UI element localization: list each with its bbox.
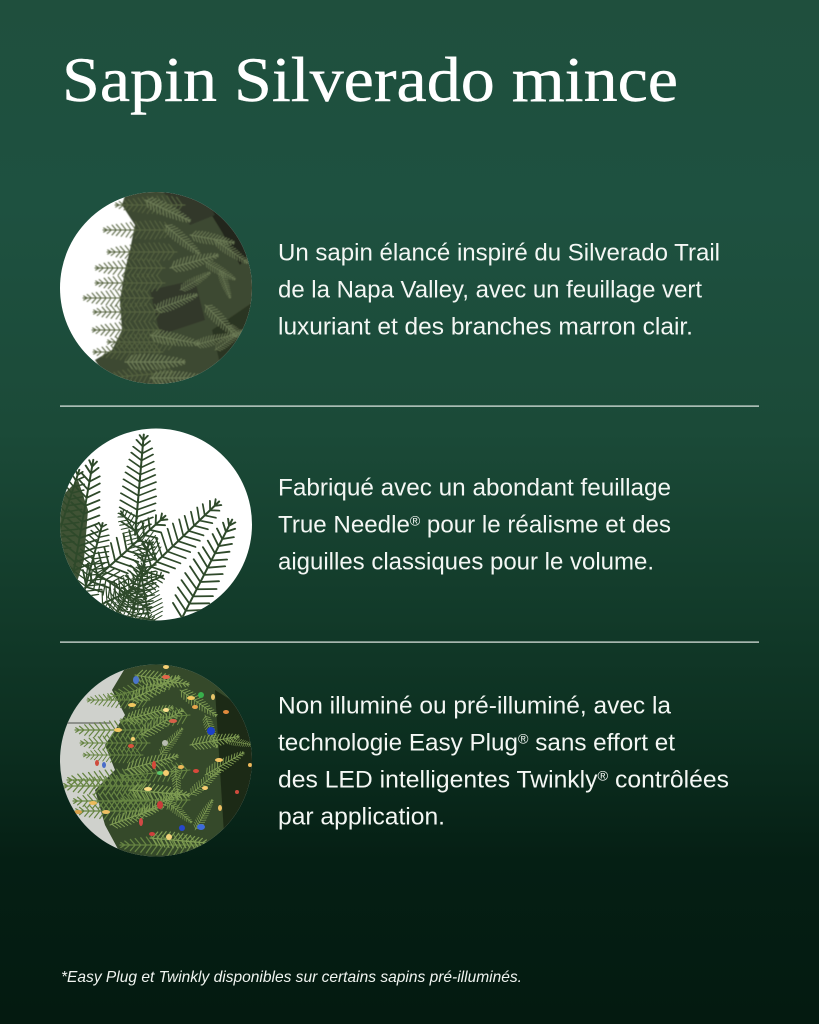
text block 3: par application. — [278, 804, 445, 830]
text block 3: ® — [598, 768, 609, 784]
image: foliage circle with white backdrop — [60, 192, 252, 384]
text block 1: Un sapin élancé inspiré du Silverado Trail — [278, 240, 720, 266]
panel: row 3 lights — [60, 660, 729, 862]
text block 3: Non illuminé ou pré-illuminé, avec la — [278, 692, 672, 720]
image: sprigs circle with white backdrop — [60, 428, 252, 620]
panel: row 1 slender tree — [60, 186, 720, 392]
text block 3: technologie Easy Plug — [278, 730, 516, 756]
title: Sapin Silverado mince — [62, 45, 678, 115]
text block 2: pour le réalisme et des — [420, 512, 671, 538]
divider — [60, 642, 759, 643]
text block 1 — [278, 240, 720, 340]
text block 2: True Needle — [278, 512, 409, 538]
text block 3 — [278, 692, 729, 830]
text block 2 — [278, 474, 671, 576]
footnote: *Easy Plug et Twinkly disponibles sur certains sapins pré-illuminés. — [61, 969, 522, 986]
panel: row 2 needles — [60, 428, 670, 620]
text block 3: sans effort et — [528, 730, 675, 756]
text block 3: des LED intelligentes Twinkly — [278, 766, 588, 794]
text block 3: ® — [518, 730, 529, 746]
lights — [74, 665, 252, 840]
divider — [60, 406, 759, 407]
image: lit tree circle — [60, 660, 260, 862]
text block 2: aiguilles classiques pour le volume. — [278, 548, 654, 576]
text block 2: Fabriqué avec un abondant feuillage — [278, 474, 671, 502]
text block 1: luxuriant et des branches marron clair. — [278, 314, 693, 340]
text block 2: ® — [410, 512, 421, 528]
text block 3: contrôlées — [608, 766, 729, 794]
text block 1: de la Napa Valley, avec un feuillage vert — [278, 276, 702, 304]
